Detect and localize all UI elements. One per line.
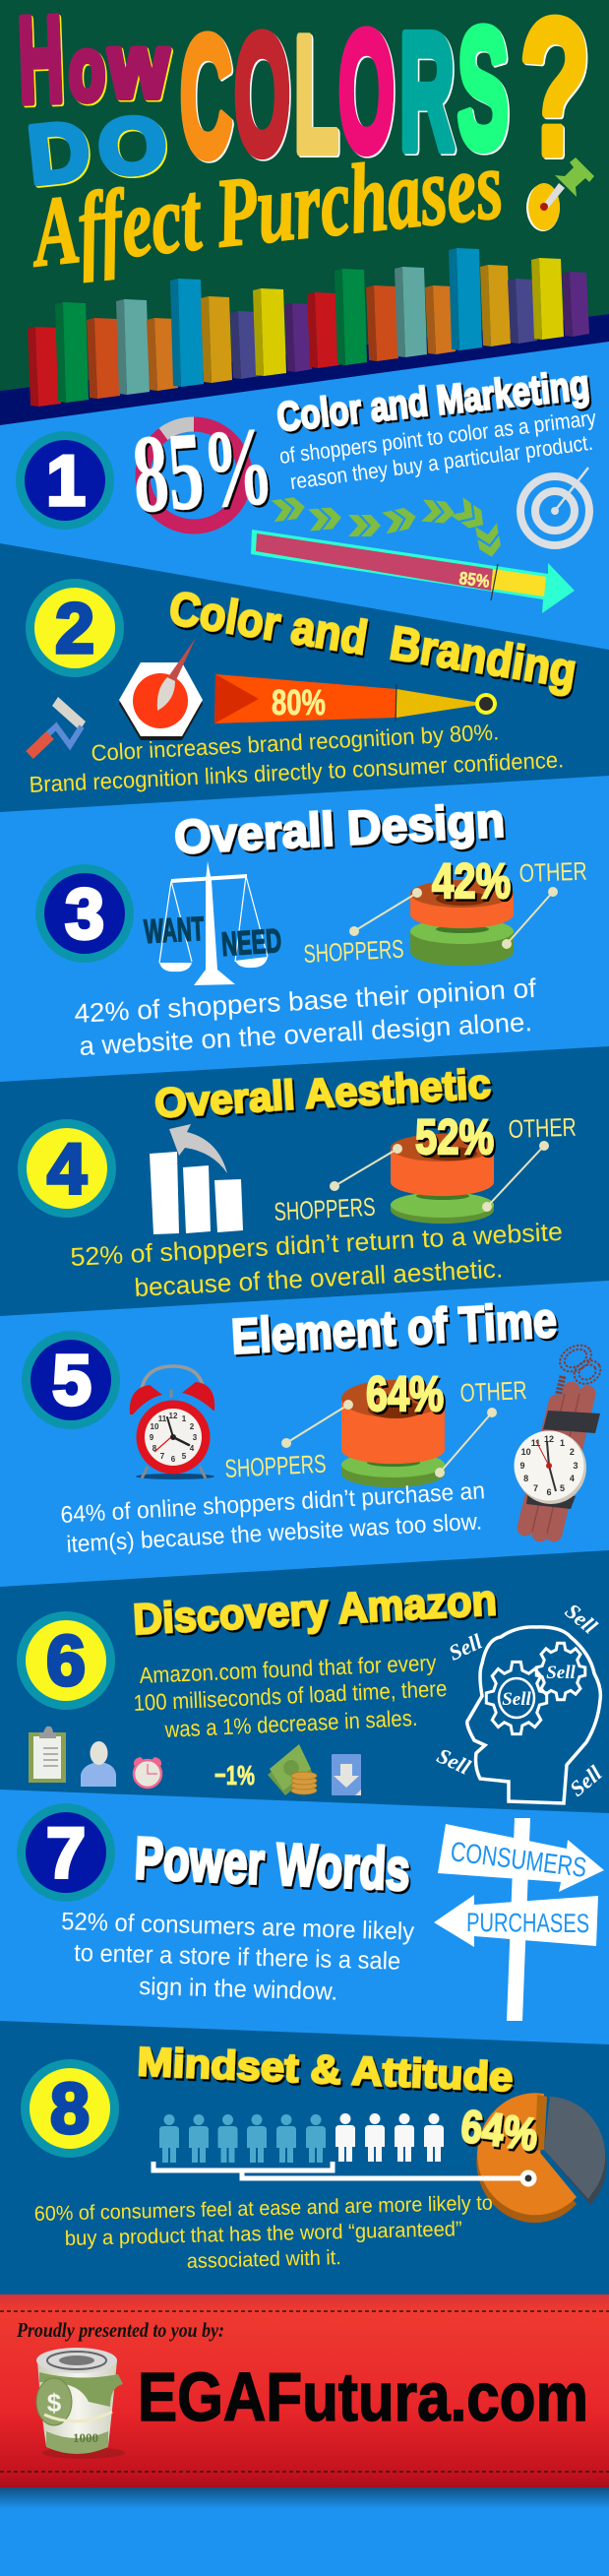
- number badge 7: [17, 1803, 115, 1902]
- icon: alarm clock: 9: [150, 1433, 154, 1442]
- icon: dynamite clock bomb: 5: [560, 1483, 565, 1493]
- number badge 5: 5: [52, 1342, 91, 1420]
- donut stack chart 64%: 64%: [366, 1366, 444, 1421]
- bracket connector: [153, 2162, 534, 2184]
- panel 5: element of time: [22, 1292, 605, 1558]
- body text 3: 42% of shoppers base their opinion of: [74, 974, 537, 1029]
- number badge 6: [17, 1611, 115, 1710]
- title word: How: o: [69, 21, 105, 119]
- title word: COLORS: L: [294, 4, 338, 186]
- heading: color and branding: Color and Branding: [165, 583, 579, 698]
- donut stack chart 52%: 52%: [415, 1109, 494, 1164]
- body text 2: Color increases brand recognition by 80%.: [91, 719, 500, 766]
- icon: pink alarm clock: [134, 1757, 161, 1788]
- chevron arrows: [272, 496, 503, 559]
- body text 2: Brand recognition links directly to consumer confidence.: [29, 746, 565, 797]
- icon: alarm clock: 5: [182, 1452, 187, 1461]
- title word: DO: [24, 99, 169, 202]
- number badge 5: [22, 1331, 120, 1429]
- donut stack chart 64%: SHOPPERS: [224, 1449, 327, 1483]
- stat: 85%: 85%: [129, 405, 276, 536]
- body text 8: buy a product that has the word “guaranteed”: [65, 2218, 462, 2250]
- header title: [16, 0, 594, 287]
- title word: COLORS: O: [338, 0, 395, 186]
- icon: download document: [332, 1754, 361, 1795]
- donut stack chart 52%: [274, 1109, 577, 1226]
- title word: COLORS: O: [234, 0, 290, 189]
- bar: 80% cone: [214, 674, 497, 723]
- icon: dynamite clock bomb: 8: [523, 1474, 528, 1483]
- number badge 6: 6: [46, 1622, 86, 1701]
- body text 5: 64% of online shoppers didn’t purchase an: [60, 1477, 486, 1529]
- donut stack chart 64%: OTHER: [459, 1375, 527, 1408]
- progress arrow 85%: 85%: [458, 568, 491, 592]
- panel 4: overall aesthetic: [18, 1060, 577, 1302]
- title word: DO: D: [24, 103, 94, 202]
- icon: head with gears: Sell: [546, 1663, 576, 1683]
- credit line: Proudly presented to you by:: [16, 2318, 224, 2342]
- panel 3: overall design: [35, 794, 587, 1061]
- footer: red banner: [0, 2294, 609, 2509]
- body text 7: 52% of consumers are more likely: [61, 1908, 415, 1946]
- donut stack chart 52%: SHOPPERS: [274, 1192, 376, 1226]
- heading: element of time: Element of Time: [230, 1292, 558, 1364]
- body text 7: sign in the window.: [139, 1973, 338, 2006]
- number badge 4: [18, 1119, 116, 1218]
- number badge 8: 8: [50, 2070, 90, 2149]
- panel 8: mindset and attitude: [21, 2039, 607, 2273]
- icon: person: [81, 1741, 116, 1787]
- icon: signpost: [434, 1818, 604, 2021]
- icon: paint roller: [30, 697, 86, 755]
- donut stack chart 52%: OTHER: [508, 1112, 577, 1144]
- number badge 3: 3: [65, 875, 104, 954]
- donut stack chart 42%: SHOPPERS: [303, 934, 404, 969]
- number badge 1: [16, 431, 114, 530]
- donut chart 85 percent: [143, 424, 245, 527]
- icon: alarm clock: 8: [152, 1444, 157, 1453]
- icon: dynamite clock bomb: 3: [573, 1461, 579, 1471]
- body text 7: to enter a store if there is a sale: [74, 1939, 400, 1976]
- icon: money roll: $: [47, 2388, 62, 2418]
- icon: push pin: [526, 157, 594, 231]
- icon: head with gears: Sell: [502, 1689, 531, 1710]
- number badge 2: [26, 579, 124, 677]
- icon: paintbrush in hexagon: [119, 638, 203, 740]
- heading: discovery amazon: Discovery Amazon: [132, 1576, 498, 1644]
- icon: dynamite clock bomb: 6: [546, 1487, 552, 1497]
- body text 6: was a 1% decrease in sales.: [163, 1705, 418, 1742]
- number badge 2: 2: [55, 590, 94, 668]
- panel 6: discovery amazon: [17, 1576, 607, 1803]
- body text 8: 60% of consumers feel at ease and are more likely to: [34, 2192, 493, 2226]
- body text 6: 100 milliseconds of load time, there: [133, 1675, 448, 1716]
- body text 8: [34, 2192, 493, 2273]
- icon: dynamite clock bomb: [514, 1340, 605, 1534]
- number badge 1: 1: [46, 442, 86, 521]
- title word: How: w: [108, 18, 169, 116]
- title word: COLORS: [180, 0, 509, 191]
- icon: head with gears: [467, 1627, 600, 1803]
- donut stack chart 42%: [303, 853, 587, 969]
- pie chart 64%: [476, 2093, 607, 2223]
- body text 4: because of the overall aesthetic.: [134, 1253, 504, 1302]
- donut stack chart 64%: [224, 1366, 527, 1487]
- body text 7: [61, 1908, 415, 2006]
- icon: target: [520, 468, 589, 545]
- number badge 7: 7: [46, 1814, 86, 1893]
- icon: balance scale want need: WANT: [143, 911, 205, 951]
- body text 4: [70, 1217, 564, 1302]
- icon: dynamite clock bomb: 10: [521, 1447, 531, 1457]
- icon: alarm clock: 10: [151, 1422, 159, 1431]
- body text 2: [29, 719, 565, 797]
- body text 3: a website on the overall design alone.: [79, 1007, 533, 1061]
- icon: dynamite clock bomb: 2: [570, 1447, 575, 1457]
- panel 7: power words: [17, 1803, 604, 2021]
- bar chart: header 3D bars: [28, 248, 589, 407]
- body text 4: 52% of shoppers didn’t return to a website: [70, 1217, 564, 1272]
- icon: dynamite clock bomb: 4: [570, 1474, 575, 1483]
- decorative words: Sell: Sell: [565, 1760, 607, 1801]
- decorative words: Sell: Sell: [561, 1599, 603, 1639]
- number badge 3: [35, 864, 134, 963]
- title word: COLORS: C: [180, 2, 232, 191]
- icon: white bars with return arrow: [150, 1124, 243, 1234]
- icon: dynamite clock bomb: 7: [533, 1483, 538, 1493]
- progress arrow 85%: [251, 530, 575, 613]
- icon: alarm clock: [130, 1366, 214, 1479]
- body text 8: associated with it.: [187, 2246, 341, 2273]
- title word: How: [16, 0, 169, 129]
- body text 5: item(s) because the website was too slow.: [66, 1508, 483, 1558]
- body text 6: [133, 1650, 448, 1742]
- icon: dynamite clock bomb: 9: [519, 1461, 525, 1471]
- icon: dynamite clock bomb: 1: [560, 1438, 565, 1448]
- icon: alarm clock: 2: [190, 1422, 195, 1431]
- number badge 4: 4: [47, 1130, 87, 1209]
- donut stack chart 42%: 42%: [432, 853, 511, 909]
- stat: minus 1%: −1%: [214, 1760, 255, 1791]
- icon: money roll: 1000: [73, 2430, 98, 2445]
- bar: 80% cone: 80%: [272, 682, 326, 723]
- icon: alarm clock: 1: [182, 1414, 187, 1423]
- icon: alarm clock: 4: [190, 1444, 195, 1453]
- icon: dynamite clock bomb: 12: [544, 1434, 554, 1444]
- panel 1: color and marketing: [16, 361, 597, 613]
- donut stack chart 42%: OTHER: [518, 856, 587, 888]
- decorative words: Sell: Sell: [433, 1743, 475, 1780]
- title word: COLORS: R: [399, 0, 455, 184]
- heading: overall design: Overall Design: [173, 794, 506, 864]
- decorative words: Sell: Sell: [445, 1628, 486, 1665]
- heading: power words: Power Words: [133, 1825, 411, 1903]
- body text 3: [74, 974, 537, 1061]
- icon: alarm clock: 11: [158, 1414, 167, 1423]
- stat: 64%: 64%: [458, 2100, 541, 2160]
- icon: balance scale want need: [143, 861, 282, 985]
- icon: balance scale want need: NEED: [220, 922, 282, 964]
- decorative words: Sell: [433, 1599, 607, 1801]
- icon: alarm clock: 6: [171, 1455, 176, 1464]
- title word: DO: O: [95, 99, 169, 192]
- body text 5: [60, 1477, 486, 1558]
- heading: overall aesthetic: Overall Aesthetic: [153, 1060, 492, 1126]
- heading: mindset and attitude: Mindset & Attitude: [137, 2039, 514, 2100]
- icon: clipboard: [29, 1727, 66, 1783]
- body text 6: Amazon.com found that for every: [139, 1650, 437, 1688]
- panel 2: color and branding: [26, 579, 579, 797]
- icon: alarm clock: 12: [169, 1412, 178, 1420]
- pictogram: ten people: [159, 2113, 444, 2163]
- icon: alarm clock: 3: [193, 1433, 198, 1442]
- icon: alarm clock: 7: [160, 1452, 165, 1461]
- icon: money and coins: [268, 1744, 317, 1795]
- number badge 8: [21, 2059, 119, 2158]
- icon: money roll: [36, 2348, 125, 2459]
- icon: dynamite clock bomb: 11: [531, 1438, 540, 1448]
